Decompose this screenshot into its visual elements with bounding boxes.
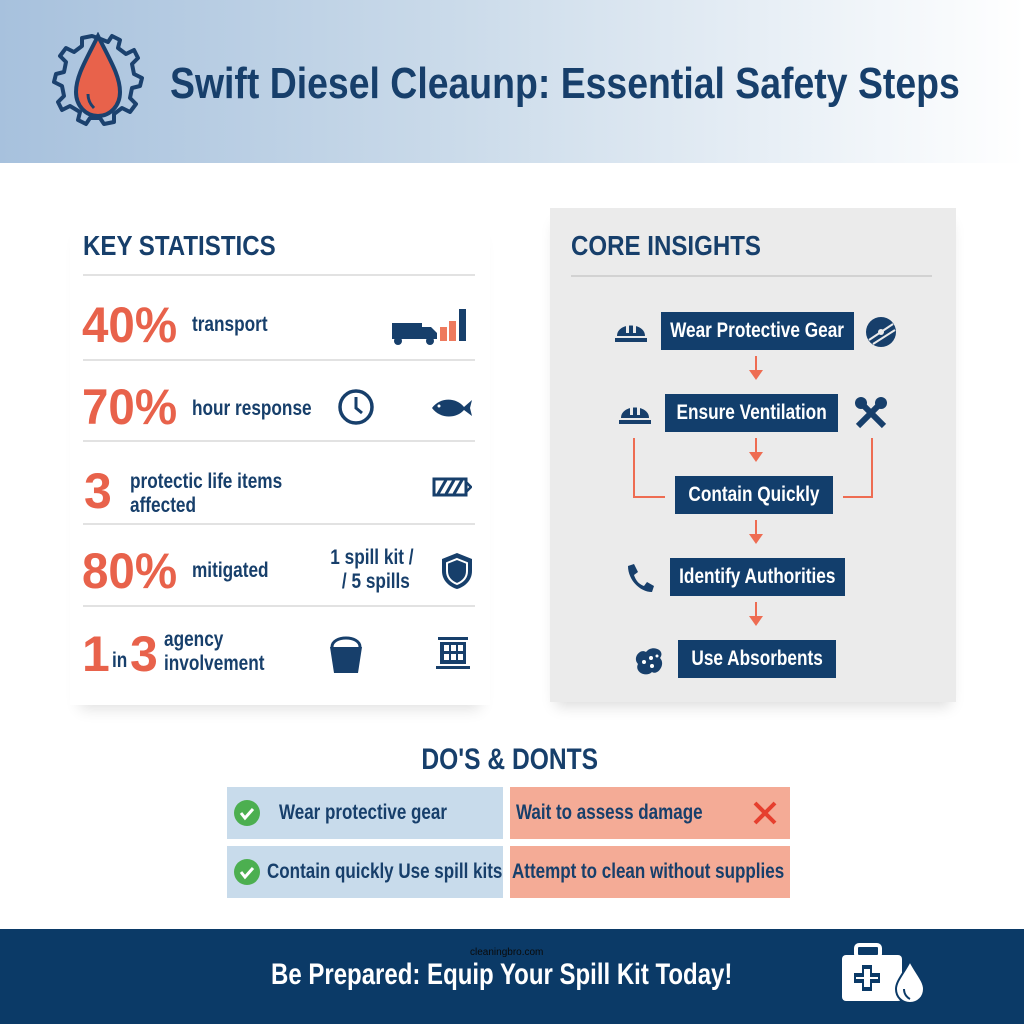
arrow 4 — [749, 602, 763, 626]
icon: hard hat 1 — [615, 326, 647, 342]
do: wear protective gear — [227, 787, 503, 839]
stat: 1 in 3 agency involvement: involvement — [164, 652, 264, 675]
heading: do's & donts: DO'S & DONTS — [422, 743, 598, 776]
do: contain quickly: Contain quickly Use spill kits — [267, 860, 502, 883]
icon: building — [436, 637, 470, 669]
arrow 1 — [749, 356, 763, 380]
step: identify authorities — [670, 558, 845, 596]
step: identify authorities: Identify Authorities — [679, 565, 836, 588]
stat: 40% transport: 40% — [82, 297, 177, 353]
stat: 3 protectic life items — [84, 463, 472, 519]
spill kit ratio — [331, 546, 414, 593]
heading: core insights: CORE INSIGHTS — [571, 230, 761, 261]
icon: fish — [432, 400, 472, 416]
header banner — [0, 0, 1024, 163]
stat: 1 in 3 agency involvement: 1 — [82, 626, 110, 682]
stat: 40% transport — [82, 297, 466, 353]
arrow 3 — [749, 520, 763, 544]
stat: 1 in 3 agency involvement: in — [112, 649, 127, 672]
stat: 3 protectic life items: 3 — [84, 463, 112, 519]
side connectors — [633, 438, 873, 498]
stat: 80% mitigated: mitigated — [192, 559, 269, 582]
icon: first aid kit with drop — [842, 943, 923, 1002]
flowchart — [615, 312, 896, 678]
icon: tools — [855, 397, 887, 428]
icon: shield — [442, 553, 472, 589]
heading: key statistics: KEY STATISTICS — [83, 230, 276, 261]
spill kit ratio: 1 spill kit / — [331, 546, 414, 569]
step: contain quickly — [675, 476, 833, 514]
stat: 80% mitigated — [82, 543, 472, 599]
panel: key statistics — [70, 215, 490, 705]
stat: 1 in 3 agency involvement: agency — [164, 628, 223, 651]
arrow 2 — [749, 438, 763, 462]
icon: clock — [338, 389, 374, 425]
icon: disc — [866, 317, 896, 347]
stat: 70% hour response — [82, 379, 472, 435]
icon: truck bars — [392, 309, 466, 345]
step: use absorbents: Use Absorbents — [691, 647, 823, 670]
icon: bucket — [330, 636, 362, 673]
step: wear protective gear: Wear Protective Gear — [671, 319, 844, 342]
footer banner — [0, 929, 1024, 1024]
panel: core insights — [550, 208, 956, 702]
dont: wait to assess damage — [510, 787, 790, 839]
table: do's and donts — [227, 787, 790, 898]
stat: 70% hour response: 70% — [82, 379, 177, 435]
dont: wait to assess damage: Wait to assess damage — [516, 801, 703, 824]
step: contain quickly: Contain Quickly — [688, 483, 820, 506]
step: use absorbents — [678, 640, 836, 678]
dont: attempt to clean: Attempt to clean without supplies — [512, 860, 784, 883]
stat: 40% transport: transport — [192, 313, 268, 336]
icon: hard hat 2 — [619, 408, 651, 424]
do: contain quickly — [227, 846, 503, 898]
icon: sponge — [636, 648, 662, 674]
icon: barrier — [432, 478, 472, 496]
title: Swift Diesel Cleaunp: Essential Safety Steps — [170, 59, 960, 108]
stat: 1 in 3 agency involvement — [82, 626, 470, 682]
stat: 3 protectic life items: affected — [130, 494, 196, 517]
stat: 80% mitigated: 80% — [82, 543, 177, 599]
footer text: Be Prepared: Equip Your Spill Kit Today! — [271, 958, 732, 991]
dont: attempt to clean — [510, 846, 790, 898]
stat: 1 in 3 agency involvement: 3 — [130, 626, 158, 682]
do: wear protective gear: Wear protective gear — [279, 801, 447, 824]
step: ensure ventilation: Ensure Ventilation — [676, 401, 827, 424]
spill kit ratio: / 5 spills — [342, 570, 410, 593]
icon: gear drop — [52, 32, 144, 126]
icon: phone — [628, 564, 654, 592]
stat: 3 protectic life items: protectic life items — [130, 470, 282, 493]
stat: 70% hour response: hour response — [192, 397, 312, 420]
step: wear protective gear — [661, 312, 854, 350]
step: ensure ventilation — [665, 394, 838, 432]
watermark: cleaningbro.com — [470, 947, 543, 958]
